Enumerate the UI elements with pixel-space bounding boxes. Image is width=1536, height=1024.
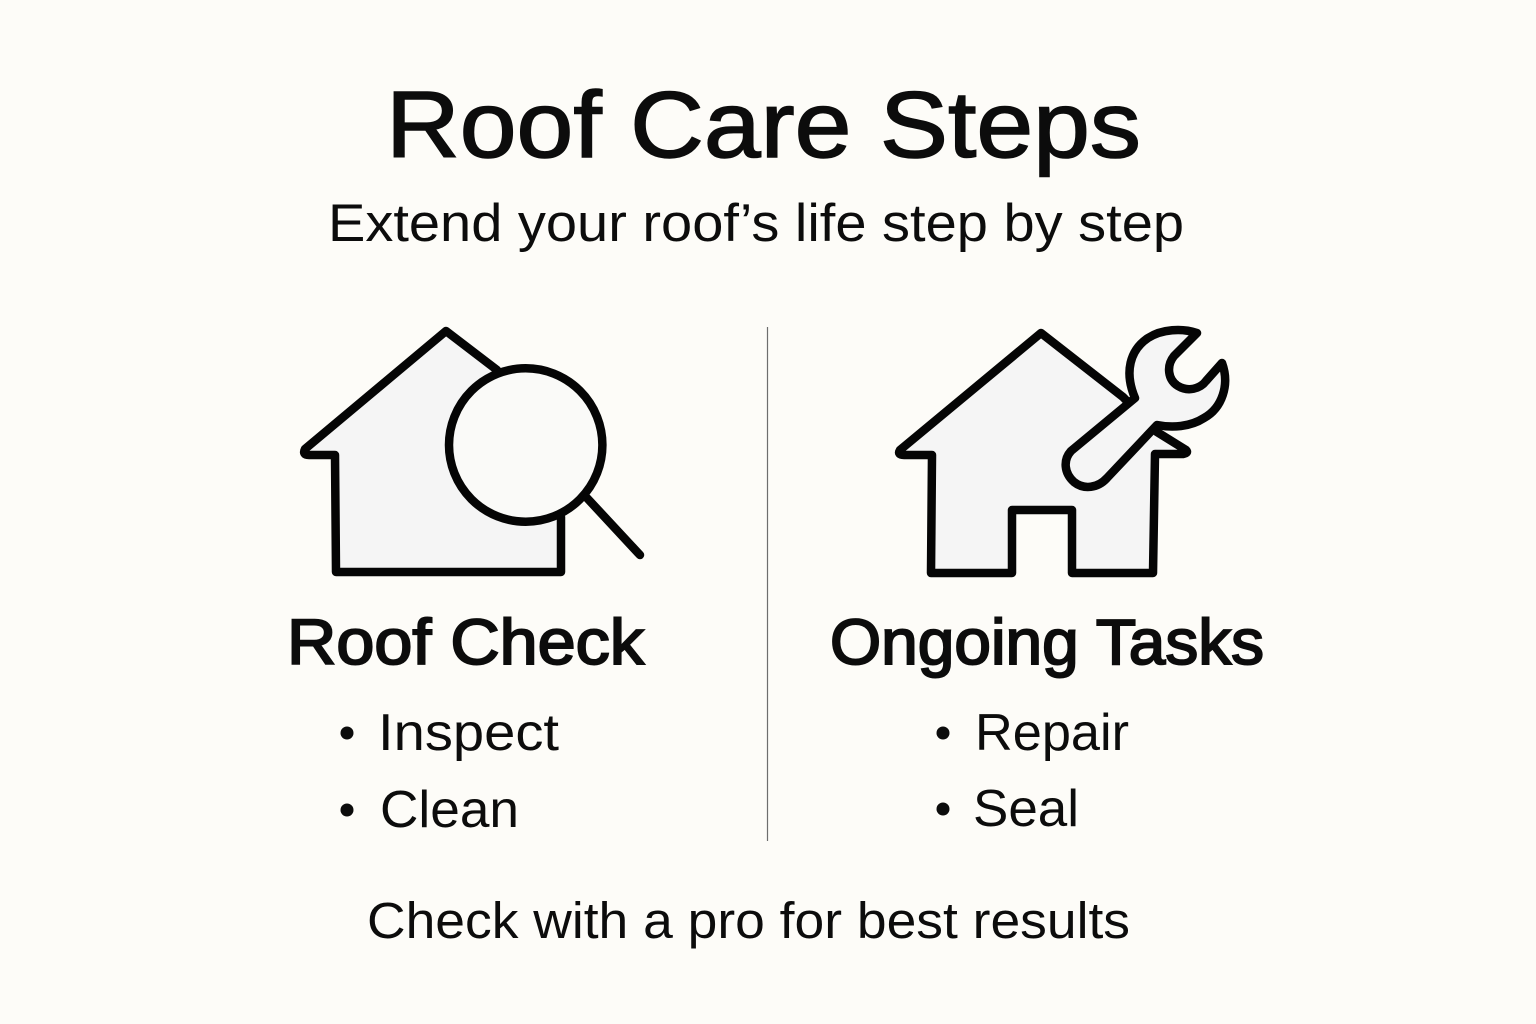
heading: ongoing tasks: Ongoing Tasks bbox=[830, 606, 1264, 678]
footer note: Check with a pro for best results bbox=[367, 892, 1130, 949]
list: roof check items bbox=[340, 704, 560, 839]
list: ongoing tasks items: Repair bbox=[975, 704, 1129, 762]
panel: roof check bbox=[287, 331, 645, 839]
list: roof check items: Clean bbox=[380, 781, 519, 839]
divider bbox=[766, 327, 768, 841]
title: Roof Care Steps bbox=[386, 72, 1141, 177]
icon: house with wrench bbox=[899, 330, 1225, 573]
subtitle: Extend your roof’s life step by step bbox=[328, 194, 1184, 253]
list: roof check items: Inspect bbox=[378, 704, 560, 762]
panel: ongoing tasks bbox=[830, 330, 1264, 838]
heading: roof check: Roof Check bbox=[287, 606, 645, 678]
list: ongoing tasks items bbox=[936, 704, 1129, 838]
icon: house with magnifying glass bbox=[304, 331, 640, 572]
list: ongoing tasks items: Seal bbox=[973, 780, 1079, 838]
